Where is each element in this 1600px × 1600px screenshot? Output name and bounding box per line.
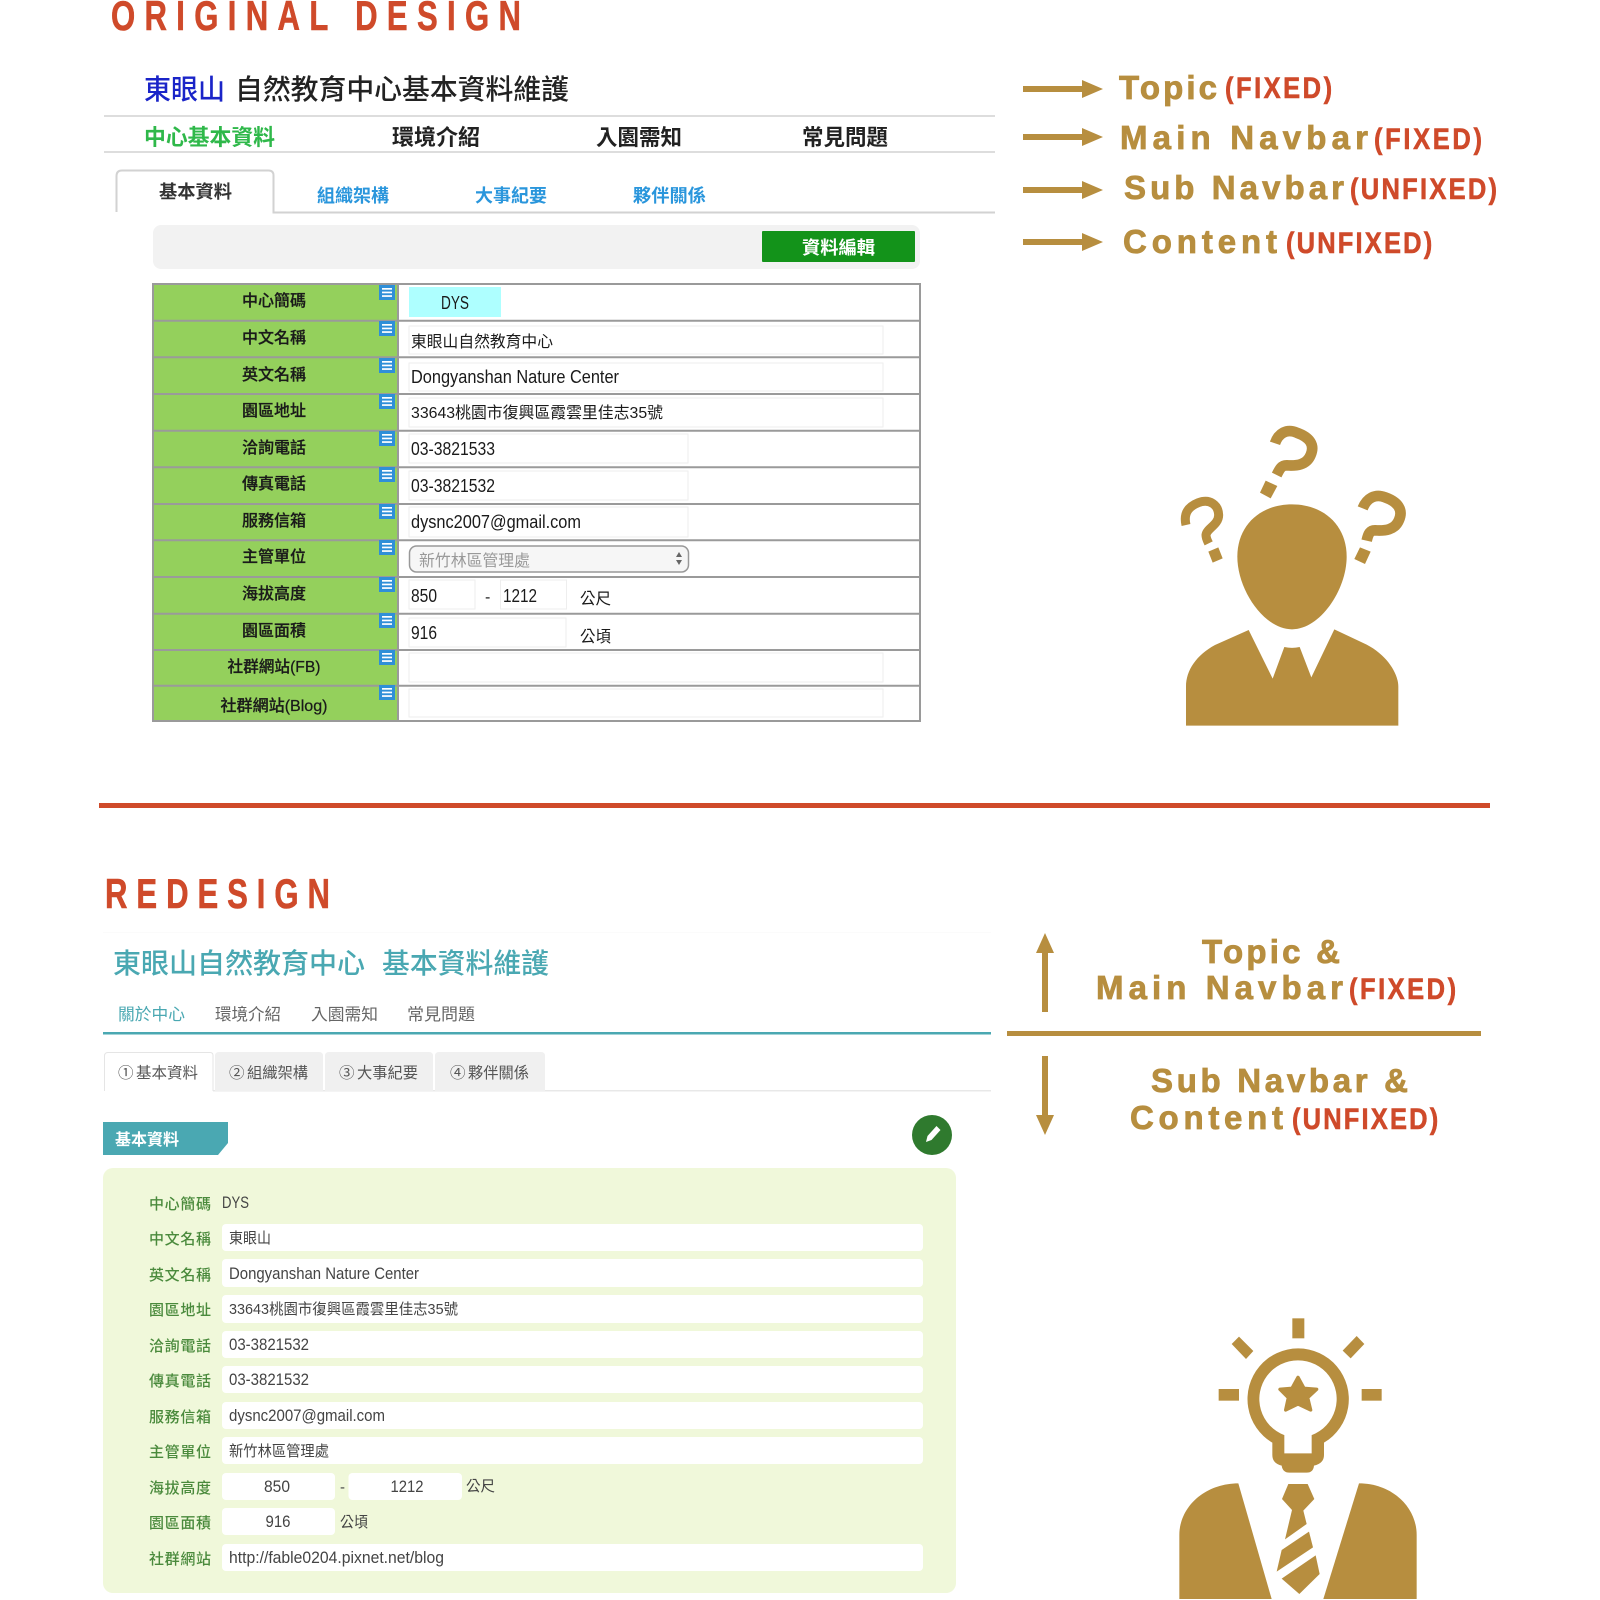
panel: redesign form: 中文名稱 xyxy=(149,1230,211,1248)
arrow: sub navbar xyxy=(1023,181,1103,199)
original data table: 服務信箱 xyxy=(242,512,306,530)
panel: redesign form: DYS xyxy=(222,1194,249,1212)
redesign sub navbar tabs: 夥伴關係 xyxy=(468,1063,529,1082)
section label: basic info xyxy=(103,1122,228,1155)
original data table: 33643桃園市復興區霞雲里佳志35號 xyxy=(411,404,663,422)
label: content unfixed: Content xyxy=(1123,223,1277,260)
panel: redesign form: dysnc2007@gmail.com xyxy=(229,1407,385,1425)
original data table: dysnc2007@gmail.com xyxy=(411,512,581,532)
section label: basic info: 基本資料 xyxy=(115,1130,179,1149)
panel: redesign form: 03-3821532 xyxy=(229,1371,309,1389)
label: topic and main navbar fixed: (FIXED) xyxy=(1349,972,1456,1005)
redesign page title: 東眼山自然教育中心 xyxy=(113,948,365,979)
original edit toolbar xyxy=(153,225,920,269)
original data table: 社群網站(FB) xyxy=(228,658,320,676)
redesign sub navbar tabs: 基本資料 xyxy=(136,1064,198,1082)
panel: redesign form: 03-3821532 xyxy=(229,1336,309,1354)
label: sub navbar unfixed xyxy=(1124,169,1497,206)
arrow: up fixed xyxy=(1036,933,1054,1012)
label: main navbar fixed xyxy=(1120,119,1482,156)
arrow: content xyxy=(1023,233,1103,251)
original data table: 850 xyxy=(411,586,437,606)
original data table: 03-3821532 xyxy=(411,476,495,496)
panel: redesign form xyxy=(103,1168,956,1593)
redesign sub navbar tabs: ④ xyxy=(450,1064,466,1082)
original data table: 英文名稱 xyxy=(242,365,306,384)
original data table: 公頃 xyxy=(580,628,611,646)
panel: redesign form: 園區地址 xyxy=(149,1302,211,1319)
panel: redesign form: 中心簡碼 xyxy=(149,1195,211,1213)
original data table: 新竹林區管理處 xyxy=(419,551,530,570)
original data table: 中文名稱 xyxy=(242,328,306,347)
panel: redesign form: 新竹林區管理處 xyxy=(229,1442,329,1460)
label: sub navbar and content unfixed xyxy=(1130,1062,1438,1136)
arrow: topic xyxy=(1023,80,1103,98)
redesign main navbar xyxy=(118,1005,475,1024)
label: sub navbar and content unfixed: Sub Navbar & xyxy=(1151,1062,1408,1099)
original sub navbar xyxy=(116,170,995,212)
panel: original screenshot xyxy=(104,74,995,721)
original main navbar xyxy=(144,125,888,150)
original page title: 東眼山 xyxy=(144,74,225,105)
redesign main navbar: 環境介紹 xyxy=(215,1005,281,1024)
panel: redesign form: 850 xyxy=(264,1478,290,1496)
panel: redesign form: 東眼山 xyxy=(229,1230,271,1247)
label: topic fixed xyxy=(1119,69,1332,106)
panel: redesign form: 社群網站 xyxy=(149,1551,211,1568)
label: topic fixed: Topic xyxy=(1119,69,1217,106)
original main navbar: 入園需知 xyxy=(596,125,682,150)
panel: redesign form: 主管單位 xyxy=(149,1443,211,1461)
original data table: 03-3821533 xyxy=(411,439,495,459)
original data table: 傳真電話 xyxy=(242,475,306,493)
original data table: 1212 xyxy=(503,586,537,606)
original edit toolbar: 資料編輯 xyxy=(802,238,875,258)
label: topic and main navbar fixed: Topic & xyxy=(1202,933,1340,970)
original data table: 東眼山自然教育中心 xyxy=(411,332,553,351)
panel: redesign form: 公頃 xyxy=(340,1514,368,1531)
original data table: 海拔高度 xyxy=(242,584,306,603)
original data table: 洽詢電話 xyxy=(242,439,306,457)
label: sub navbar and content unfixed: Content xyxy=(1130,1099,1283,1136)
redesign main navbar: 常見問題 xyxy=(407,1005,475,1024)
panel: redesign form: 33643桃園市復興區霞雲里佳志35號 xyxy=(229,1301,458,1318)
panel: redesign form: 1212 xyxy=(390,1478,424,1496)
panel: redesign form: 英文名稱 xyxy=(149,1266,211,1284)
original data table: DYS xyxy=(441,293,469,313)
label: sub navbar and content unfixed: (UNFIXED) xyxy=(1292,1102,1438,1135)
redesign sub navbar tabs xyxy=(104,1052,991,1092)
original main navbar: 中心基本資料 xyxy=(144,125,275,150)
panel: redesign form: 916 xyxy=(266,1513,290,1531)
heading: redesign: REDESIGN xyxy=(105,870,330,917)
label: sub navbar unfixed: (UNFIXED) xyxy=(1350,172,1497,205)
label: sub navbar unfixed: Sub Navbar xyxy=(1124,169,1344,206)
original page title: 自然教育中心基本資料維護 xyxy=(235,74,569,105)
redesign sub navbar tabs: ① xyxy=(118,1064,134,1082)
redesign sub navbar tabs: ③ xyxy=(339,1064,355,1082)
original data table: 主管單位 xyxy=(242,547,306,566)
panel: redesign form: Dongyanshan Nature Center xyxy=(229,1265,419,1283)
label: content unfixed: (UNFIXED) xyxy=(1286,226,1432,259)
original sub navbar: 基本資料 xyxy=(159,182,232,202)
original data table: 916 xyxy=(411,623,437,643)
label: topic fixed: (FIXED) xyxy=(1225,71,1332,104)
panel: redesign form: - xyxy=(340,1479,345,1496)
arrow: down unfixed xyxy=(1036,1056,1054,1135)
original sub navbar: 夥伴關係 xyxy=(633,185,706,206)
label: main navbar fixed: Main Navbar xyxy=(1120,119,1368,156)
label: topic and main navbar fixed xyxy=(1096,933,1456,1006)
panel: redesign form: 傳真電話 xyxy=(149,1372,211,1390)
redesign sub navbar tabs: 組織架構 xyxy=(247,1064,308,1082)
original main navbar: 常見問題 xyxy=(802,125,888,150)
original main navbar: 環境介紹 xyxy=(392,125,480,150)
icon: edit pencil button xyxy=(912,1115,952,1155)
panel: redesign form: 公尺 xyxy=(466,1478,495,1495)
redesign sub navbar tabs: ② xyxy=(229,1064,245,1082)
icon: person with idea bulb xyxy=(1179,1318,1417,1599)
redesign main navbar: 入園需知 xyxy=(311,1005,378,1024)
original data table xyxy=(153,284,920,721)
redesign page title: 基本資料維護 xyxy=(382,948,549,979)
label: content unfixed xyxy=(1123,223,1432,260)
panel: redesign form: 服務信箱 xyxy=(149,1408,211,1426)
original data table: Dongyanshan Nature Center xyxy=(411,367,619,387)
redesign page title xyxy=(113,948,549,979)
label: topic and main navbar fixed: Main Navbar xyxy=(1096,969,1343,1006)
panel: redesigned screenshot xyxy=(103,932,991,1593)
original data table: 園區面積 xyxy=(242,622,306,640)
arrow: main navbar xyxy=(1023,128,1103,146)
original sub navbar: 組織架構 xyxy=(317,185,389,206)
redesign main navbar: 關於中心 xyxy=(118,1005,185,1024)
original data table: - xyxy=(485,589,490,606)
original data table: 公尺 xyxy=(580,590,611,608)
panel: redesign form: http://fable0204.pixnet.net/blog xyxy=(229,1549,444,1567)
redesign sub navbar tabs: 大事紀要 xyxy=(357,1064,418,1082)
original data table: 園區地址 xyxy=(242,402,306,420)
panel: redesign form: 洽詢電話 xyxy=(149,1337,211,1355)
icon: confused person xyxy=(1185,431,1401,726)
original data table: 中心簡碼 xyxy=(242,291,306,310)
panel: redesign form: 園區面積 xyxy=(149,1515,211,1532)
label: main navbar fixed: (FIXED) xyxy=(1374,122,1482,155)
original data table: 社群網站(Blog) xyxy=(220,697,328,715)
panel: redesign form: 海拔高度 xyxy=(149,1480,211,1497)
original sub navbar: 大事紀要 xyxy=(475,185,547,206)
